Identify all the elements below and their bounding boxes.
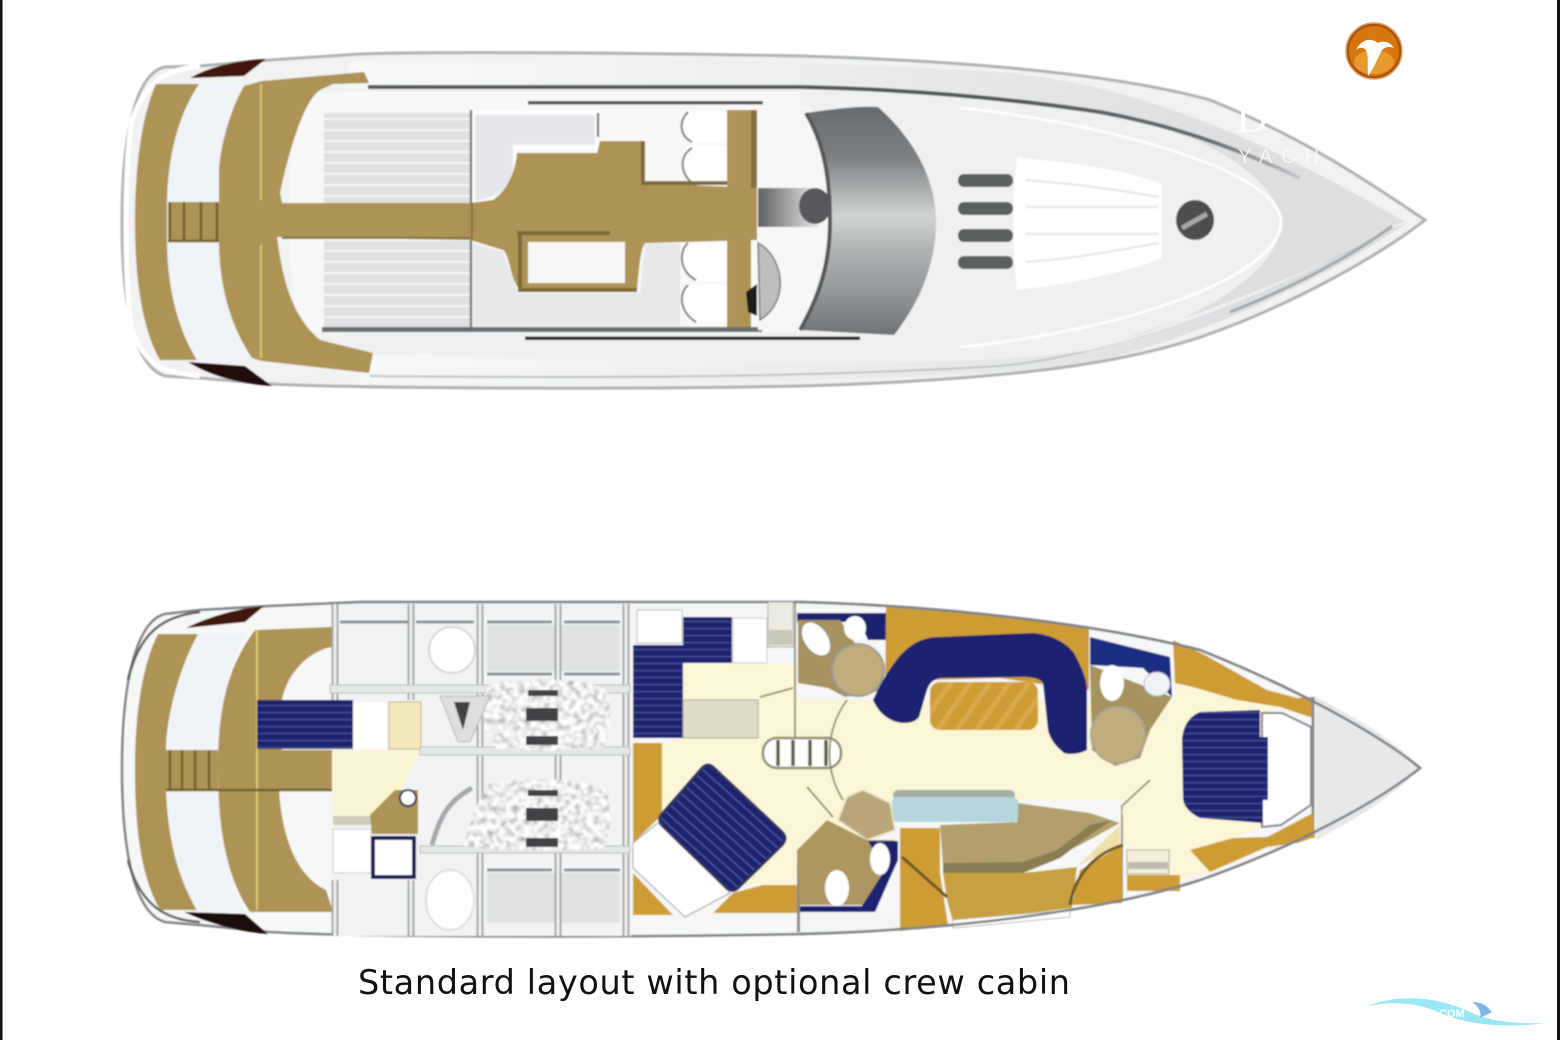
vents <box>958 174 1013 269</box>
grey store upper <box>487 625 620 671</box>
toilet <box>795 617 837 661</box>
vip bed square <box>683 617 732 663</box>
galley sole band <box>943 820 1112 873</box>
head navy trim <box>1090 637 1172 697</box>
swoosh wave <box>1366 998 1545 1026</box>
v strut dark core <box>454 702 470 730</box>
companionway steps <box>763 738 841 768</box>
owner teak left <box>633 743 662 843</box>
hatch dark <box>799 188 831 224</box>
bow grey inner edge <box>1230 226 1392 312</box>
engine port <box>482 679 610 751</box>
head navy trim <box>797 613 886 640</box>
shower disc <box>832 644 884 696</box>
crew cabin bed <box>257 700 353 749</box>
galley counter <box>892 797 1018 822</box>
toilet <box>825 870 849 906</box>
boarding steps <box>168 202 220 242</box>
cabin top white <box>634 604 796 664</box>
tank top <box>429 627 475 673</box>
steps outline <box>763 738 841 768</box>
upper deck plan <box>122 53 1425 388</box>
head floor <box>797 820 895 905</box>
sun pad upper <box>324 113 470 205</box>
galley dark curves <box>902 845 1123 905</box>
steps lines <box>168 202 219 242</box>
basin <box>844 616 866 640</box>
galley teak right <box>1072 845 1122 905</box>
exhaust top <box>190 59 266 78</box>
tank bottom <box>426 870 474 930</box>
sun pad lower <box>324 241 470 327</box>
deck divider line <box>256 630 258 910</box>
console shadow <box>758 188 818 227</box>
watermark D: D <box>1236 93 1268 142</box>
windscreen <box>800 107 936 335</box>
side deck bottom grey edge <box>370 228 1392 377</box>
logo badge <box>1346 23 1402 79</box>
windscreen inner edge <box>800 113 830 330</box>
badge bird <box>1356 40 1394 76</box>
helm seats <box>682 112 727 322</box>
engine room light bars <box>330 685 630 853</box>
lower deck plan <box>122 601 1420 936</box>
grey bow panel <box>1120 130 1392 340</box>
forward cabin teak top <box>1173 640 1315 718</box>
top deck dark rail <box>368 87 1300 178</box>
seat pad line <box>471 110 598 327</box>
seat pad upper <box>473 113 597 203</box>
head navy trim <box>800 841 898 912</box>
caption: Standard layout with optional crew cabin <box>358 963 1070 1002</box>
crew berth white <box>333 829 371 873</box>
crew cabin locker <box>353 702 387 749</box>
swoosh fin <box>1472 1002 1492 1018</box>
side deck bottom <box>360 224 1405 384</box>
engine details <box>526 790 558 847</box>
badge inner <box>1349 26 1399 76</box>
exhaust bottom <box>184 912 268 934</box>
seat 1 <box>683 112 727 143</box>
aft deck divider lines <box>260 84 262 358</box>
pale wedge <box>1077 825 1120 867</box>
helm console white <box>758 105 833 330</box>
engine room framing <box>335 604 626 936</box>
galley counter shadow <box>893 790 1015 800</box>
owner cabin cream floor <box>660 664 1175 885</box>
engine details <box>526 690 558 745</box>
stern rub rail dark <box>128 612 200 922</box>
blue-white band lower <box>168 241 250 362</box>
exhaust top <box>186 606 264 628</box>
aft bottom white strip <box>800 913 898 932</box>
engine body <box>464 779 610 851</box>
galley tan disc <box>838 790 895 840</box>
galley sole <box>940 803 1120 866</box>
seat pad lower <box>473 243 680 326</box>
bottom watermark swoosh <box>1366 998 1545 1026</box>
blue-white band <box>168 634 245 750</box>
lower head <box>797 820 898 912</box>
engine room floor <box>333 604 631 936</box>
instrument panel <box>758 243 780 320</box>
day head port <box>795 613 886 697</box>
aft vertical bar <box>797 850 800 932</box>
owner teak lower <box>713 885 798 913</box>
owner teak lower left <box>633 873 673 915</box>
owner bed <box>660 765 785 890</box>
hatch <box>1013 157 1162 290</box>
forward bed <box>1182 710 1268 823</box>
v strut <box>440 696 490 742</box>
seat 2 <box>682 146 727 186</box>
aft deck teak <box>219 72 470 373</box>
badge highlight <box>1354 50 1394 74</box>
stern platform teak <box>135 634 198 910</box>
lower unit stripe <box>1128 862 1168 869</box>
coaming shadow lower <box>322 327 762 332</box>
crew head basin <box>400 790 416 806</box>
walkway olive edge <box>282 203 472 240</box>
right edge bar <box>1557 0 1560 1040</box>
saloon table <box>930 682 1038 730</box>
forward cabin teak bottom <box>1190 813 1315 872</box>
head floor <box>798 620 885 697</box>
forward cabin cream <box>1122 684 1282 893</box>
basin <box>1144 672 1170 696</box>
helm bulkhead teak lower <box>727 240 751 327</box>
seat arcs <box>682 112 696 322</box>
porthole glint <box>1182 214 1207 228</box>
hull edge redraw <box>800 602 1420 934</box>
crew cabin cream floor <box>333 750 420 816</box>
head floor <box>1090 665 1172 766</box>
seat 3 <box>682 243 727 281</box>
engine starboard <box>464 779 610 851</box>
blue-white band lower <box>168 790 245 912</box>
crew walkway bar <box>333 816 371 825</box>
hatch lines <box>1026 180 1158 262</box>
exhaust bottom <box>188 362 272 386</box>
vip unit stripe <box>769 630 792 645</box>
forward cabin whites <box>1262 713 1311 827</box>
foredeck <box>345 90 1392 364</box>
coaming black lower <box>525 336 860 340</box>
sofa <box>873 633 1087 754</box>
stern rub rail <box>126 66 200 376</box>
shelf <box>683 700 758 738</box>
aft deck teak body <box>470 141 757 290</box>
coaming shadow upper <box>528 101 763 104</box>
vip locker white <box>637 610 682 643</box>
crew shower <box>373 838 414 877</box>
forward cabin frame <box>1312 697 1314 838</box>
engine body <box>482 679 610 751</box>
toilet <box>1100 665 1124 701</box>
porthole <box>1176 200 1214 240</box>
lower unit <box>1127 850 1169 874</box>
seat 4 <box>682 285 727 322</box>
grey store lower <box>487 873 620 923</box>
lower teak strip <box>1127 875 1180 891</box>
stern platform teak <box>135 84 199 360</box>
steps panel <box>168 202 220 242</box>
curve strut <box>432 788 472 845</box>
vip locker right <box>733 618 767 663</box>
badge ring <box>1346 23 1402 79</box>
crew head teak <box>370 790 418 834</box>
teak shading <box>517 141 757 290</box>
side deck top <box>345 59 1405 226</box>
swoosh text: .COM <box>1436 1008 1465 1020</box>
white strip <box>953 910 1070 928</box>
crew cabin unit <box>389 702 421 749</box>
steps treads <box>778 740 826 766</box>
steps panel <box>166 750 218 790</box>
central table cut-out <box>528 242 625 283</box>
vip bed vertical <box>633 645 683 738</box>
shower disc <box>1091 707 1145 763</box>
boarding steps <box>166 750 332 790</box>
galley teak floor <box>943 867 1077 922</box>
vip unit <box>768 602 793 647</box>
basin <box>870 843 890 875</box>
aft deck teak <box>218 627 333 912</box>
foredeck white line <box>960 108 1281 347</box>
helm bulkhead teak <box>727 110 757 188</box>
helm teak shade <box>751 110 757 188</box>
left edge bar <box>0 0 2 1040</box>
blue-white band <box>168 84 240 205</box>
hull outline lower <box>122 601 1420 936</box>
hull outline upper <box>122 53 1425 388</box>
steps lines <box>166 750 332 790</box>
saloon teak top <box>885 607 1089 700</box>
cockpit floor <box>289 92 800 332</box>
galley teak block <box>900 828 948 931</box>
bow grey <box>1316 697 1420 840</box>
dark corner <box>746 284 757 316</box>
watermark YACHT: YACH <box>1238 146 1328 168</box>
bulkhead lines <box>760 602 1195 900</box>
owner bed base <box>633 823 730 917</box>
forward head <box>1090 637 1172 766</box>
